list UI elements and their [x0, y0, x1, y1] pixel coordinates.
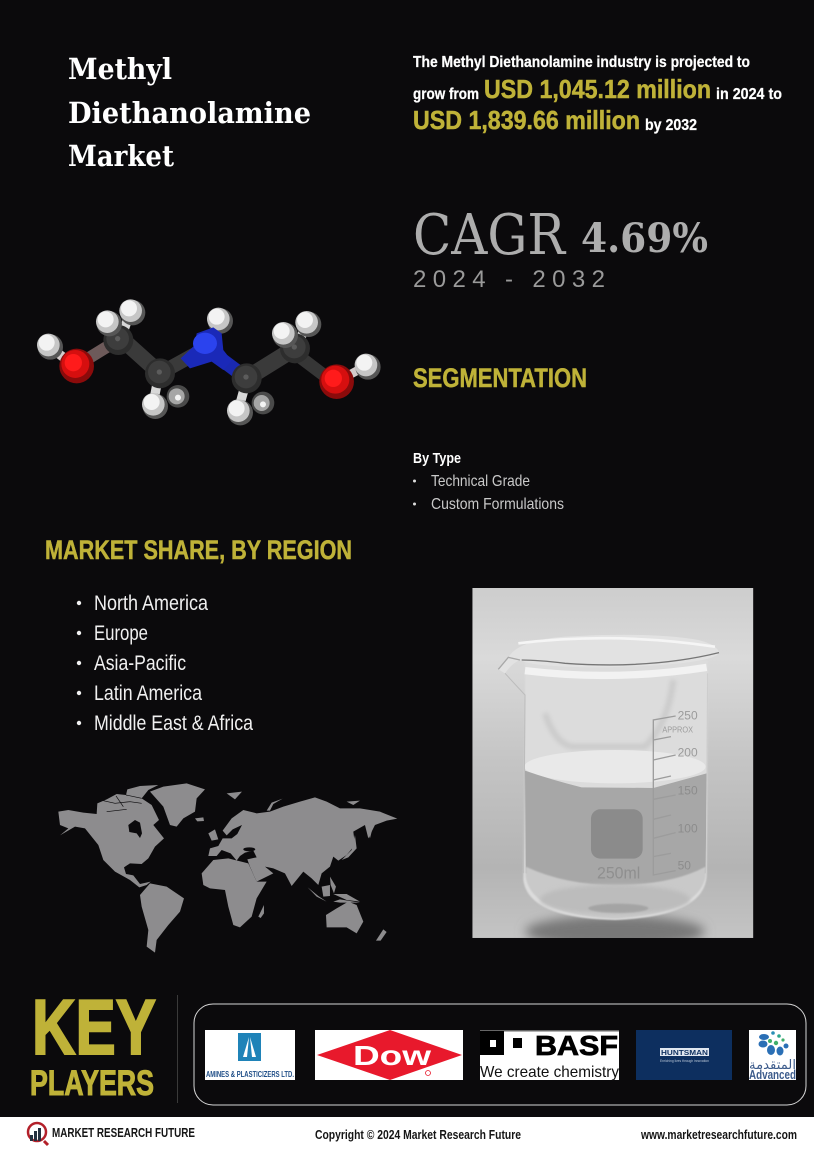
logo: Huntsman: Enriching lives through innovation [660, 1059, 709, 1063]
logo: BASF: We create chemistry [480, 1064, 619, 1081]
photo: beaker with liquid: 200 [678, 746, 698, 760]
panel: key player logos [194, 1004, 806, 1105]
logo: Huntsman: HUNTSMAN [661, 1048, 708, 1057]
photo: beaker with liquid: 250ml [597, 864, 640, 883]
title: Diethanolamine [68, 96, 311, 130]
footer [0, 1117, 814, 1150]
photo: beaker with liquid: 250 [678, 708, 698, 722]
logo: Dow: Dow [353, 1040, 431, 1071]
CAGR figure: CAGR [413, 203, 567, 268]
logo: Amines and Plasticizers: AMINES & PLASTICIZERS LTD. [206, 1070, 294, 1079]
world map [58, 783, 397, 953]
region list [77, 592, 253, 735]
market projection text: grow from [413, 86, 479, 103]
title: Methyl [68, 52, 172, 86]
region list: Europe [94, 622, 148, 645]
photo: beaker with liquid [472, 588, 753, 948]
photo: beaker with liquid: 150 [678, 784, 698, 798]
footer: MARKET RESEARCH FUTURE [52, 1125, 195, 1140]
market projection text: by 2032 [645, 117, 697, 134]
CAGR figure [413, 203, 708, 293]
logo: Huntsman [636, 1030, 732, 1080]
heading: key players: PLAYERS [30, 1064, 154, 1103]
icon: Market Research Future logo [28, 1123, 48, 1145]
logo: Dow [315, 1030, 463, 1080]
region list: Latin America [94, 682, 202, 705]
market projection text: in 2024 to [716, 86, 782, 103]
heading: key players [30, 983, 156, 1103]
segmentation list [413, 450, 564, 513]
market projection text: USD 1,839.66 million [413, 105, 640, 135]
title: Market [68, 139, 175, 173]
logo: Amines and Plasticizers [205, 1030, 295, 1080]
segmentation list: Custom Formulations [431, 496, 564, 513]
footer: Copyright © 2024 Market Research Future [315, 1127, 521, 1142]
segmentation list: Technical Grade [431, 473, 530, 490]
market projection text: The Methyl Diethanolamine industry is projected to [413, 54, 750, 71]
icon: molecule [37, 299, 381, 425]
CAGR figure: 4.69% [581, 215, 708, 262]
heading: key players: KEY [32, 983, 156, 1071]
photo: beaker with liquid: 50 [678, 858, 691, 872]
CAGR figure: 2024 - 2032 [413, 266, 605, 293]
title [68, 52, 311, 173]
logo: Advanced [749, 1030, 796, 1082]
region list: Asia-Pacific [94, 652, 186, 675]
logo: BASF [480, 1030, 619, 1081]
logo: BASF: BASF [535, 1030, 618, 1061]
market projection text [413, 54, 782, 135]
logo: Advanced: المتقدمة [749, 1058, 796, 1073]
photo: beaker with liquid: 100 [678, 822, 698, 836]
logo: Advanced: Advanced [749, 1067, 796, 1082]
region list: North America [94, 592, 208, 615]
market projection text: USD 1,045.12 million [484, 74, 711, 104]
photo: beaker with liquid: APPROX [662, 726, 694, 735]
segmentation list: By Type [413, 450, 461, 467]
region list: Middle East & Africa [94, 712, 253, 735]
heading: segmentation: SEGMENTATION [413, 363, 587, 393]
heading: market share by region: MARKET SHARE, BY REGION [45, 535, 352, 565]
